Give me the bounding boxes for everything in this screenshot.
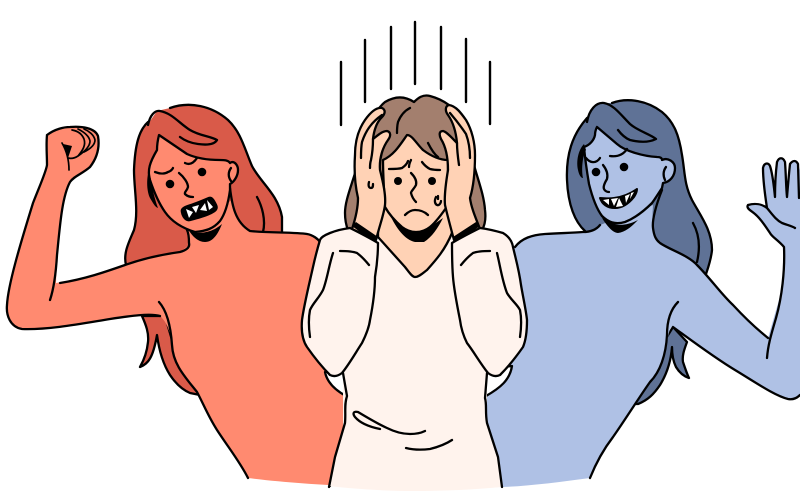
right hand (440, 105, 480, 240)
central hair strands (397, 108, 438, 157)
blue face (584, 127, 675, 223)
red face (149, 135, 238, 232)
blue grin (600, 189, 637, 208)
central neck and face (378, 205, 452, 277)
left hand (352, 108, 390, 240)
cuffs (352, 222, 480, 243)
blue hair shadow (577, 144, 586, 178)
figure: angry red woman (7, 105, 352, 486)
central sweater body (329, 233, 502, 491)
belly fold lines (354, 412, 452, 450)
figure: cheerful blue woman (480, 100, 800, 487)
blue back hair (567, 100, 712, 276)
red body and arm (7, 127, 352, 486)
blue eyes (592, 163, 628, 176)
left hand finger lines (361, 115, 382, 188)
central hair (345, 95, 485, 230)
blue neck shadow (602, 218, 638, 233)
red eyes (166, 168, 206, 188)
left sleeve (302, 228, 378, 376)
right sleeve (452, 228, 527, 376)
blue lower hair (625, 327, 689, 404)
right hand finger lines (450, 113, 470, 165)
red neck shadow (188, 224, 222, 242)
stress lines above head (341, 22, 490, 125)
central neck shadow (390, 215, 443, 242)
blue brows and nose (586, 149, 627, 192)
red brows and nose (155, 158, 197, 197)
red back hair (125, 105, 282, 270)
figure: anxious central woman (302, 22, 527, 491)
red hair shadow (147, 170, 158, 208)
red fist details (62, 129, 95, 170)
central sweat drop (435, 196, 441, 205)
central brows, nose, mouth (389, 160, 440, 215)
blue body and arm (480, 158, 800, 487)
central eyes (394, 177, 436, 185)
white gaps under sleeves (325, 366, 512, 396)
red lower hair (140, 316, 200, 395)
red snarling mouth (182, 198, 217, 220)
